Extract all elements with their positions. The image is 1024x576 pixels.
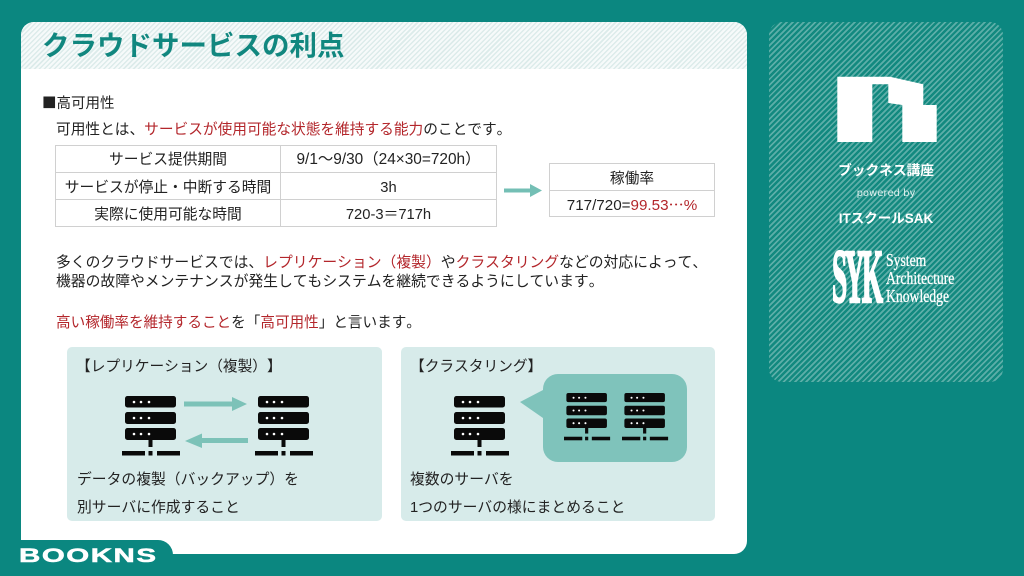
table: availability figures: サービス提供期間: [109, 152, 227, 168]
arrow: replicate right: [184, 397, 247, 411]
SAK wordmark: [886, 250, 954, 306]
SAK monogram: SYK: [832, 235, 881, 319]
header band: [21, 22, 747, 69]
clustering description: 1つのサーバの様にまとめること: [410, 500, 625, 516]
table: operating rate: [549, 163, 715, 217]
table: availability figures: 720-3＝717h: [346, 206, 431, 222]
clustering heading: 【クラスタリング】: [410, 359, 542, 375]
speech bubble: server cluster: [520, 374, 687, 462]
footer tab: [0, 540, 173, 576]
paragraph: how availability is maintained: [56, 254, 707, 290]
table: operating rate: 717/720=99.53…%: [567, 192, 697, 214]
definition sentence: 高い稼働率を維持することを「高可用性」と言います。: [56, 315, 421, 331]
paragraph: how availability is maintained: 多くのクラウドサービスでは、レプリケーション（複製）やクラスタリングなどの対応によって、: [56, 255, 707, 271]
icon: server, cluster member 2: [622, 393, 668, 440]
table: availability figures: [55, 145, 497, 227]
paragraph: how availability is maintained: 機器の故障やメンテナンスが発生してもシステムを継続できるようにしています。: [56, 274, 604, 290]
replication description: 別サーバに作成すること: [77, 500, 240, 516]
brand name: ブックネス講座: [838, 163, 934, 178]
table: operating rate: 稼働率: [610, 170, 654, 186]
school name: ITスクールSAK: [839, 211, 933, 226]
icon: server, replication target: [255, 396, 313, 456]
icon: server, cluster member 1: [564, 393, 610, 440]
SAK logo: [832, 235, 954, 319]
replication heading: 【レプリケーション（複製）】: [76, 359, 282, 375]
title: クラウドサービスの利点: [42, 30, 344, 61]
replication description: データの複製（バックアップ）を: [77, 472, 299, 488]
side panel: [769, 22, 1003, 382]
table: availability figures: 9/1〜9/30（24×30=720h）: [296, 151, 480, 168]
panel: replication: [67, 347, 382, 521]
table: availability figures: サービスが停止・中断する時間: [65, 180, 271, 196]
SAK wordmark: System: [886, 250, 926, 270]
table: availability figures: 3h: [380, 180, 397, 196]
clustering description: 複数のサーバを: [410, 472, 514, 488]
replication description: [77, 471, 299, 516]
table: availability figures: 実際に使用可能な時間: [94, 206, 242, 222]
footer logo: BOOKNS: [19, 546, 158, 567]
arrow: replicate left: [185, 434, 248, 448]
clustering description: [410, 471, 625, 516]
main white card: [21, 22, 747, 554]
powered by: powered by: [857, 188, 915, 199]
icon: server, replication source: [122, 396, 180, 456]
panel: clustering: [401, 347, 715, 521]
intro sentence: 可用性とは、サービスが使用可能な状態を維持する能力のことです。: [56, 122, 511, 138]
icon: server, clustered view: [451, 396, 509, 456]
SAK wordmark: Knowledge: [886, 286, 949, 306]
section heading: ■高可用性: [42, 92, 114, 113]
SAK wordmark: Architecture: [886, 268, 954, 288]
